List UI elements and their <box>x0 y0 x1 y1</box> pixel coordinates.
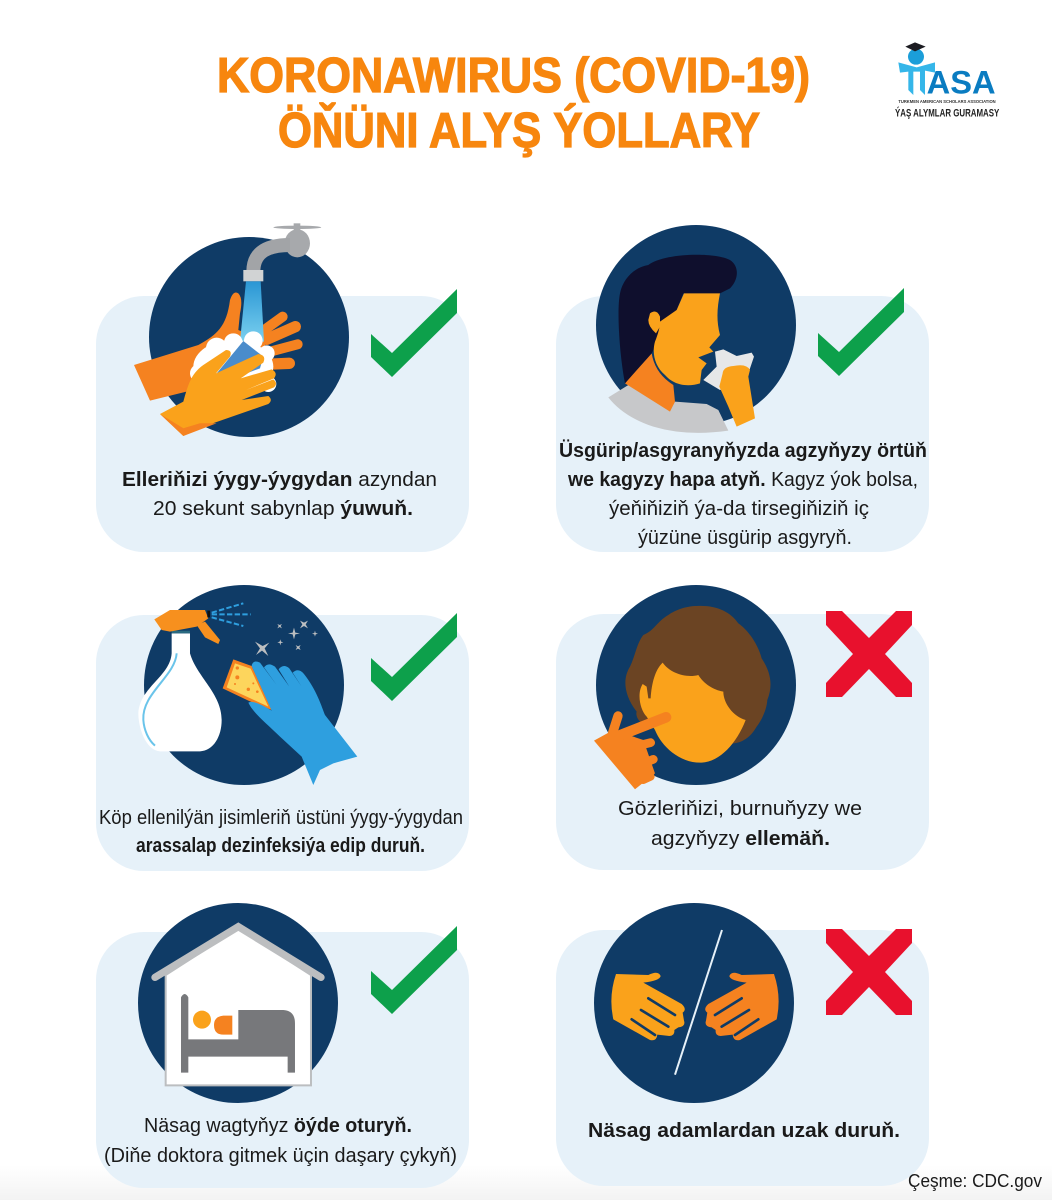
panel background <box>556 296 929 552</box>
icon: circle <box>144 585 344 785</box>
icon: circle <box>596 585 796 785</box>
text: Köp ellenilýän jisimleriň üstüni ýygy-ýygydan <box>99 806 463 829</box>
icon: check mark <box>371 926 457 1014</box>
logo: TASA <box>895 42 1000 119</box>
logo: TASA: ASA <box>927 64 996 100</box>
icon: separated hands <box>611 930 779 1075</box>
panel background <box>96 296 469 552</box>
icon: hand washing <box>134 223 321 436</box>
panel: do not touch face <box>556 585 929 870</box>
text: (Diňe doktora gitmek üçin daşary çykyň) <box>104 1144 457 1167</box>
text: we kagyzy hapa atyň. Kagyz ýok bolsa, <box>567 468 918 491</box>
icon: circle <box>138 903 338 1103</box>
text <box>99 806 463 857</box>
icon: touching face <box>594 606 771 789</box>
text: Üsgürip/asgyranyňyzda agzyňyzy örtüň <box>559 439 927 462</box>
icon: check mark <box>818 288 904 376</box>
text: ýeňiňiziň ýa-da tirsegiňiziň iç <box>609 497 869 520</box>
icon: check mark <box>371 613 457 701</box>
icon: person coughing <box>608 255 755 433</box>
text: Näsag adamlardan uzak duruň. <box>588 1119 900 1142</box>
icon: circle <box>149 237 349 437</box>
icon: cross mark <box>826 929 912 1015</box>
panel background <box>556 614 929 870</box>
panel background <box>556 930 929 1186</box>
logo: TASA: ÝAŞ ALYMLAR GURAMASY <box>895 106 1000 119</box>
text <box>559 439 927 549</box>
text <box>122 468 437 520</box>
icon: circle <box>596 225 796 425</box>
title: ÖŇÜNI ALYŞ ÝOLLARY <box>278 103 760 158</box>
text: Gözleriňizi, burnuňyzy we <box>618 797 862 820</box>
logo: TASA: TURKMEN AMERICAN SCHOLARS ASSOCIATION <box>898 99 996 104</box>
panel: wash hands <box>96 223 469 552</box>
icon: circle <box>594 903 794 1103</box>
icon: check mark <box>371 289 457 377</box>
text: agzyňyzy ellemäň. <box>651 827 830 850</box>
title <box>217 49 810 158</box>
panel: stay home <box>96 903 469 1188</box>
panel: disinfect surfaces <box>96 585 469 871</box>
panel background <box>96 615 469 871</box>
icon: house with bed <box>155 927 321 1085</box>
panel: keep distance <box>556 903 929 1186</box>
text: Elleriňizi ýygy-ýygydan azyndan <box>122 468 437 491</box>
title: KORONAWIRUS (COVID-19) <box>217 49 810 103</box>
text: ýüzüne üsgürip asgyryň. <box>638 526 852 549</box>
panel: cover cough <box>556 225 929 552</box>
panel background <box>96 932 469 1188</box>
text: 20 sekunt sabynlap ýuwuň. <box>153 497 413 520</box>
icon: spray and glove <box>138 603 357 785</box>
text <box>104 1114 457 1167</box>
text: arassalap dezinfeksiýa edip duruň. <box>136 834 425 857</box>
text <box>618 797 862 850</box>
source credit: Çeşme: CDC.gov <box>908 1171 1042 1191</box>
text: Näsag wagtyňyz öýde oturyň. <box>144 1114 412 1137</box>
icon: cross mark <box>826 611 912 697</box>
